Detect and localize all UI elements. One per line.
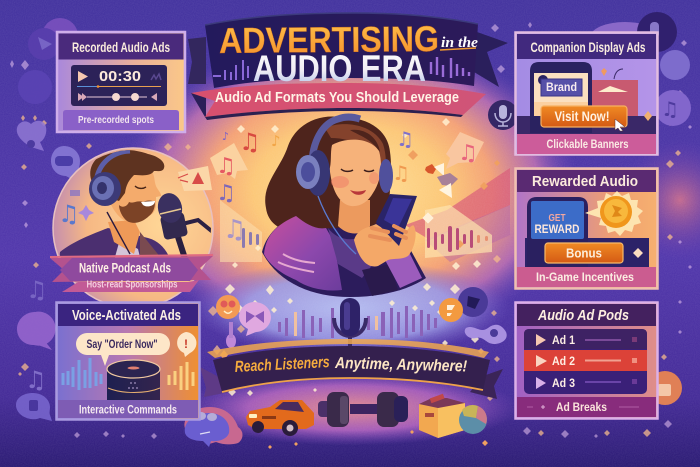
cursor [615, 119, 625, 131]
man scene: podcast host [53, 148, 214, 308]
title in the: in the [441, 35, 478, 51]
woman cables [318, 196, 356, 254]
footer caption: Pre-recorded spots [78, 115, 154, 126]
woman sweater [264, 216, 342, 291]
ad scene [517, 62, 656, 134]
sound wave left of woman [242, 228, 259, 248]
background icons: left bubbles: ♫ [26, 276, 48, 304]
subtitle ribbon [191, 83, 486, 120]
ad note bubble near man [178, 166, 212, 191]
mic badge icon [488, 100, 518, 130]
microphone [158, 193, 211, 256]
alert bubble: ! [184, 337, 188, 351]
chat bubble creature [184, 407, 242, 444]
coin [585, 191, 643, 236]
woman phone and hands [354, 224, 416, 266]
background icons: left bubbles: ♫ [25, 366, 47, 394]
slogan text: Anytime, Anywhere! [334, 355, 468, 375]
footer caption [517, 134, 656, 154]
panel: audio ad pods [516, 302, 658, 418]
footer caption [517, 397, 656, 417]
heading [517, 34, 656, 59]
banner waveform right [431, 57, 469, 78]
ribbon title: Native Podcast Ads [79, 260, 171, 276]
background icons: left bubbles [16, 18, 80, 421]
footer caption [58, 400, 198, 418]
footer caption: Clickable Banners [546, 139, 628, 151]
audio player: 00:30 [99, 68, 141, 85]
heading [58, 304, 198, 326]
slogan text: Reach Listeners [234, 354, 330, 376]
ad list [524, 329, 647, 394]
footer caption [517, 267, 656, 287]
man hair [90, 150, 164, 201]
panel: voice-activated ads [56, 302, 200, 420]
speech bubble [76, 333, 170, 366]
banner tails [188, 37, 206, 84]
brand label: Brand [546, 80, 577, 94]
bonus button: Bonus [566, 246, 602, 260]
visit now button: Visit Now! [554, 109, 610, 124]
ball [459, 405, 487, 434]
smart speaker [107, 360, 160, 400]
ad 3 row: Ad 3 [552, 376, 575, 390]
central woman listening [262, 116, 426, 297]
car [246, 400, 314, 436]
heading: Recorded Audio Ads [72, 40, 170, 55]
ribbon: native podcast ads [50, 255, 213, 292]
heading: Audio Ad Pods [537, 307, 629, 324]
floating music notes and shapes: ♫ [223, 215, 246, 245]
ad 1 row: Ad 1 [552, 333, 575, 347]
title text: ADVERTISING [219, 18, 439, 61]
floating music notes and shapes: ♫ [216, 181, 236, 206]
slogan text [234, 354, 468, 376]
footer caption: In-Game Incentives [536, 270, 634, 284]
dumbbell [318, 392, 408, 427]
heading: Companion Display Ads [530, 40, 646, 55]
woman hair [265, 116, 391, 230]
heading: Voice-Activated Ads [72, 307, 181, 324]
heading [517, 304, 656, 326]
ad 2 row: Ad 2 [552, 354, 575, 368]
bottom slogan banner [200, 339, 503, 399]
floating music notes and shapes: ♫ [216, 154, 236, 179]
background icons: right bubbles: ♫ [661, 97, 679, 121]
background icons: right bubbles [591, 12, 691, 405]
floating music notes and shapes: ♫ [396, 127, 414, 151]
man headphones [94, 150, 130, 176]
panel: companion display ads [516, 32, 658, 154]
footer caption: Ad Breaks [556, 400, 607, 414]
panel: rewarded audio [516, 168, 658, 288]
dark banner [205, 13, 478, 88]
title audio era: AUDIO ERA [253, 48, 426, 89]
small bubbles lower center left [216, 295, 271, 348]
small icons lower center right [439, 287, 507, 344]
title banner [188, 13, 508, 120]
man scene: podcast host: ♫ [58, 200, 80, 228]
panel: recorded audio ads [57, 32, 185, 132]
woman neck and face [338, 200, 370, 234]
floating music notes and shapes [210, 127, 484, 245]
woman body backing [262, 216, 426, 297]
man jacket [60, 228, 168, 258]
floating music notes and shapes: ♫ [392, 161, 410, 185]
reward scene: REWARD [534, 222, 580, 236]
heading [517, 170, 656, 192]
subtitle ribbon: Audio Ad Formats You Should Leverage [215, 90, 459, 106]
box [419, 394, 465, 438]
floating music notes and shapes: ♫ [458, 141, 478, 166]
banner waveform left [213, 60, 248, 80]
sound wave right of woman [427, 226, 488, 252]
woman headphones [312, 117, 360, 165]
alert bubble [177, 332, 196, 357]
microphone and wave lower center [278, 298, 437, 350]
man face [111, 173, 161, 222]
ribbon subtitle: Host-read Sponsorships [86, 280, 178, 290]
bottom icons row [184, 392, 487, 447]
footer caption: Interactive Commands [79, 402, 177, 416]
reward scene [525, 191, 649, 267]
floating music notes and shapes: ♫ [239, 128, 261, 156]
reward scene: GET [548, 213, 566, 224]
floating music notes and shapes: ♪ [222, 130, 229, 143]
heading: Rewarded Audio [532, 173, 638, 190]
waveforms [63, 358, 101, 390]
speech bubble: Say "Order Now" [86, 339, 158, 351]
floating music notes and shapes: ♪ [271, 132, 281, 150]
